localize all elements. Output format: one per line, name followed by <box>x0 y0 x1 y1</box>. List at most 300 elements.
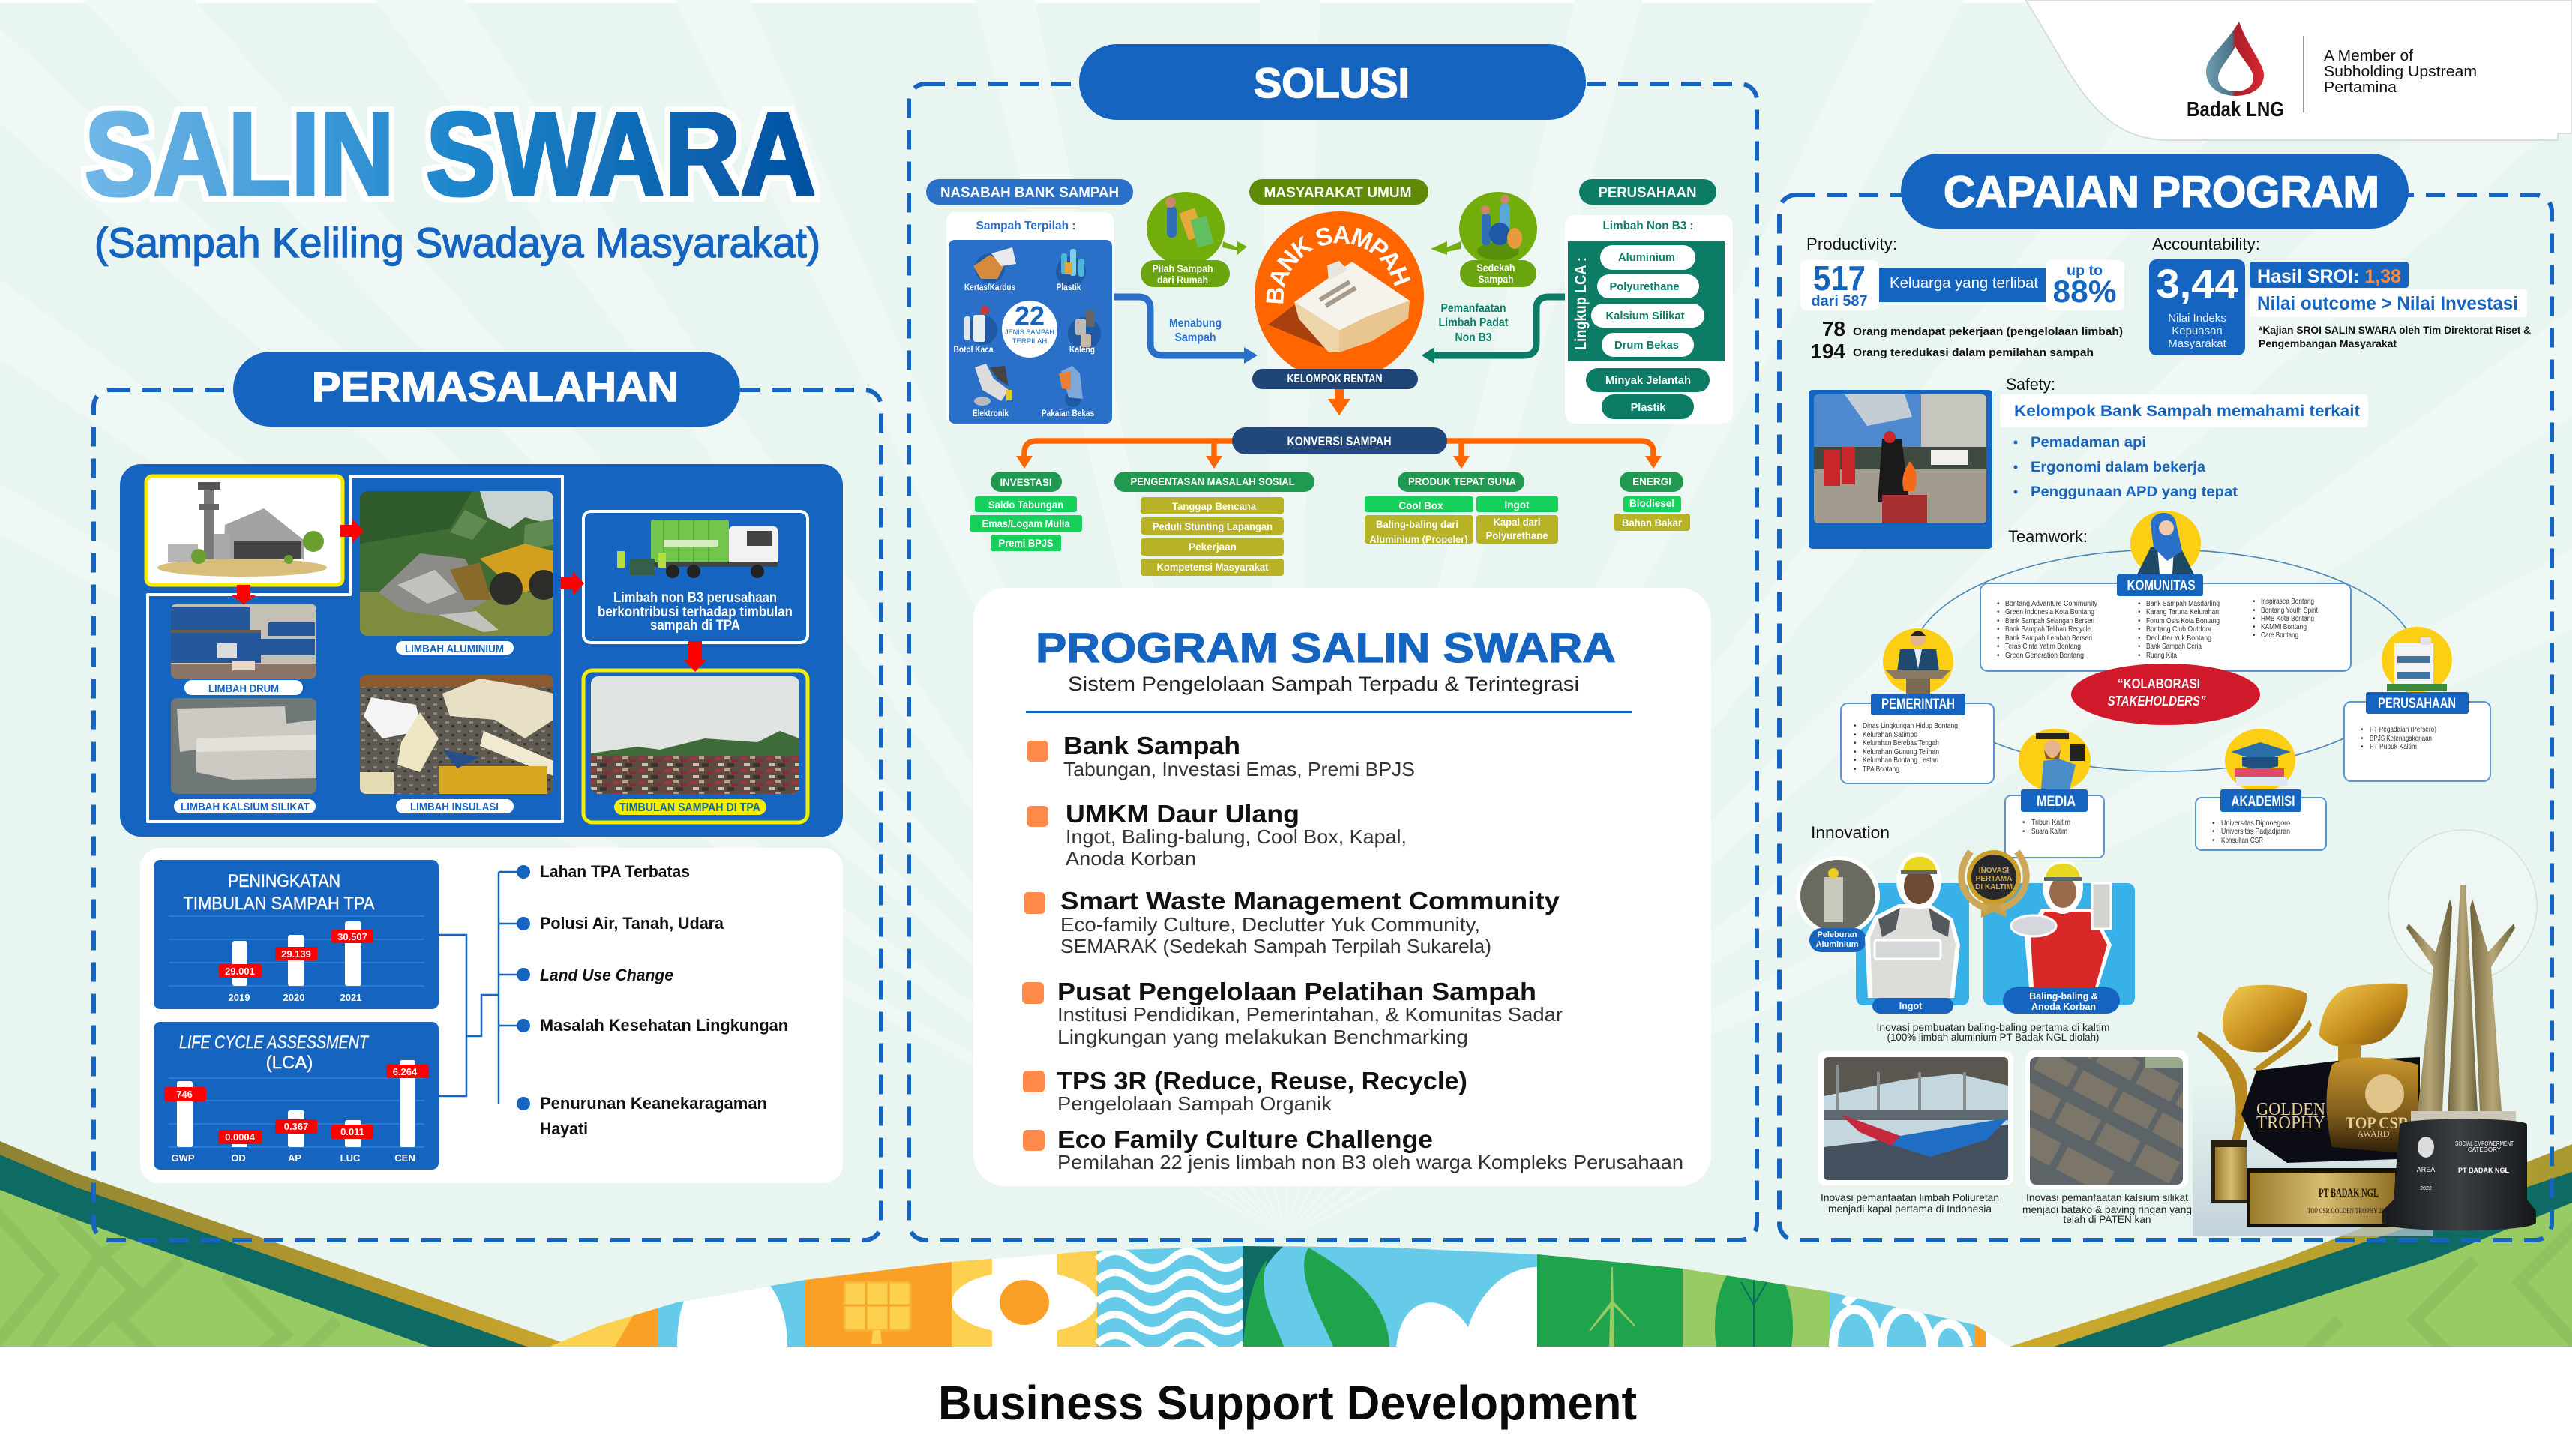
label: kelompok rentan: KELOMPOK RENTAN <box>1287 373 1383 385</box>
arrow: waste to truck <box>561 571 584 595</box>
stat: families involved <box>1800 259 2124 310</box>
photo: peleburan aluminium: Aluminium <box>1816 940 1859 949</box>
heading: permasalahan <box>233 352 740 427</box>
trophy: area: SOCIAL EMPOWERMENT <box>2455 1140 2514 1147</box>
stakeholder: pemerintah <box>1841 628 1994 783</box>
list: energi: Bahan Bakar <box>1622 517 1683 529</box>
heading: solusi: SOLUSI <box>1254 59 1410 106</box>
callout: safety list <box>2000 394 2368 500</box>
list: investasi: Saldo Tabungan <box>988 499 1063 511</box>
list: produk tepat guna: Kapal dari <box>1494 517 1540 528</box>
arrow: truck to landfill <box>684 641 706 672</box>
photo: peleburan aluminium <box>1796 856 1880 952</box>
bar chart: life cycle assessment: 0.0004 <box>225 1131 256 1143</box>
list: komunitas column 3: • <box>2253 598 2256 606</box>
panel: waste flow <box>120 464 843 837</box>
list: pemerintah: Kelurahan Berebas Tengah <box>1863 739 1939 747</box>
pill: konversi sampah <box>1232 427 1447 454</box>
item: pusat pengelolaan pelatihan sampah <box>1022 978 1563 1048</box>
stakeholder: akademisi <box>2196 729 2326 850</box>
bar chart: peningkatan timbulan sampah: 2020 <box>283 992 304 1003</box>
list: produk tepat guna: Polyurethane <box>1486 530 1548 541</box>
callout: non B3 waste and truck: Limbah non B3 perusahaan <box>613 590 777 606</box>
list: produk tepat guna: Baling-baling dari <box>1376 519 1458 530</box>
pill: nasabah bank sampah <box>926 179 1133 205</box>
arrow: menabung <box>1112 297 1245 355</box>
list: pemerintah: Dinas Lingkungan Hidup Bontang <box>1863 722 1958 730</box>
pill: perusahaan <box>1579 179 1716 205</box>
photo: insulation <box>360 675 553 794</box>
stat: sroi: Pengembangan Masyarakat <box>2259 337 2397 349</box>
list: akademisi: Universitas Diponegoro <box>2221 819 2290 828</box>
trophy: top csr golden: TOP CSR GOLDEN TROPHY 2022 <box>2307 1207 2390 1215</box>
heading: accountability: Accountability: <box>2152 235 2260 253</box>
pills: category headers: PENGENTASAN MASALAH SOSIAL <box>1131 476 1294 487</box>
stat: families involved: dari 587 <box>1812 293 1867 310</box>
list: komunitas column 3: • <box>2253 631 2256 640</box>
caption: bricks: menjadi batako & paving ringan yang <box>2022 1203 2192 1215</box>
stakeholder: media <box>2005 729 2104 858</box>
list: pemerintah: Kelurahan Gunung Telihan <box>1863 748 1939 756</box>
icon: bank sampah circle <box>1255 211 1424 369</box>
label: menabung sampah: Menabung <box>1169 317 1222 330</box>
item: tps 3r: TPS 3R (Reduce, Reuse, Recycle) <box>1057 1067 1467 1095</box>
panel: sampah terpilah: Kertas/Kardus <box>964 282 1015 292</box>
label: LIMBAH KALSIUM SILIKAT <box>181 801 310 813</box>
stat: employment and education: Orang mendapat pekerjaan (pengelolaan limbah) <box>1853 326 2123 338</box>
list: pemerintah: • <box>1854 731 1857 739</box>
pill: perusahaan: PERUSAHAAN <box>1599 185 1696 201</box>
panel: limbah non b3: Minyak Jelantah <box>1605 375 1691 387</box>
list: pengentasan masalah sosial <box>1141 497 1284 576</box>
list: problems: Land Use Change <box>540 966 673 984</box>
bar chart: life cycle assessment: (LCA) <box>266 1053 313 1073</box>
decorative corner bands left <box>0 1141 561 1347</box>
bar chart: life cycle assessment: 0.011 <box>340 1126 364 1137</box>
list: komunitas column 3: HMB Kota Bontang <box>2261 615 2314 623</box>
bar chart: life cycle assessment: OD <box>231 1152 246 1164</box>
trophy: area: 2022 <box>2420 1186 2432 1191</box>
list: produk tepat guna <box>1365 496 1558 545</box>
caption: baling-baling: (100% limbah aluminium PT Badak NGL diolah) <box>1887 1032 2100 1043</box>
photo: aluminium waste <box>360 491 559 636</box>
item: eco family culture challenge: Eco Family Culture Challenge <box>1057 1125 1433 1153</box>
decorative corner bands right <box>2010 1144 2572 1357</box>
list: komunitas column 3: • <box>2253 607 2256 615</box>
photo: innovators panels <box>1796 850 2135 1014</box>
list: media: Tribun Kaltim <box>2031 819 2070 827</box>
pill: masyarakat umum: MASYARAKAT UMUM <box>1264 185 1411 201</box>
list: problems: Polusi Air, Tanah, Udara <box>540 914 724 933</box>
list: energi: Biodiesel <box>1629 498 1674 509</box>
caption: boat <box>1821 1191 1999 1215</box>
panel: limbah non b3: Kalsium Silikat <box>1606 310 1685 322</box>
icon: kaleng <box>1068 310 1101 350</box>
trophy: top csr golden: TOP CSR <box>2346 1113 2409 1132</box>
list: komunitas column 3: Care Bontang <box>2261 631 2298 640</box>
heading: solusi <box>1079 44 1586 120</box>
list: problems: Penurunan Keanekaragaman <box>540 1094 767 1113</box>
heading: capaian program <box>1901 154 2409 229</box>
label: baling-baling: Baling-baling & <box>2029 991 2098 1002</box>
list: akademisi: • <box>2212 837 2215 845</box>
list: problems: Masalah Kesehatan Lingkungan <box>540 1016 788 1035</box>
bar chart: peningkatan timbulan sampah: TIMBULAN SAMPAH TPA <box>183 894 375 914</box>
arrow: plant to drum <box>232 585 256 604</box>
arrow: head menabung <box>1244 347 1258 364</box>
icon: elektronik <box>974 364 1012 406</box>
list: media <box>2022 819 2070 836</box>
label: ingot: Ingot <box>1899 1001 1923 1011</box>
icon: sedekah sampah: Sampah <box>1479 274 1513 285</box>
list: produk tepat guna: Ingot <box>1504 499 1530 511</box>
pill: nasabah bank sampah: NASABAH BANK SAMPAH <box>940 185 1119 201</box>
list: komunitas column 1: Green Indonesia Kota Bontang <box>2005 608 2094 616</box>
stakeholder: komunitas <box>1980 511 2351 671</box>
trophy: top csr golden: TROPHY <box>2256 1113 2325 1133</box>
heading: permasalahan: PERMASALAHAN <box>312 363 679 410</box>
list: perusahaan: PT Pegadaian (Persero) <box>2370 726 2436 734</box>
bar chart: life cycle assessment: GWP <box>171 1152 195 1164</box>
callout: safety list: Pemadaman api <box>2031 435 2146 451</box>
list: komunitas column 2: • <box>2138 608 2141 616</box>
trophy: area: PT BADAK NGL <box>2458 1167 2509 1174</box>
list: komunitas column 1: • <box>1997 634 2000 643</box>
pill: masyarakat umum <box>1249 179 1428 205</box>
photo: safety training <box>1809 390 1992 549</box>
list: perusahaan: BPJS Ketenagakerjaan <box>2370 735 2432 743</box>
photo: landfill: TIMBULAN SAMPAH DI TPA <box>619 801 760 814</box>
list: perusahaan: PT Pupuk Kaltim <box>2370 743 2417 751</box>
pills: category headers <box>991 472 1683 492</box>
stat: families involved: 517 <box>1813 259 1866 298</box>
22 jenis sampah badge: TERPILAH <box>1012 337 1047 346</box>
photo: boat <box>1818 1051 2013 1185</box>
list: investasi: Premi BPJS <box>999 538 1053 549</box>
main title <box>85 88 816 220</box>
22 jenis sampah badge <box>1002 301 1057 358</box>
callout: non B3 waste and truck: berkontribusi terhadap timbulan <box>598 604 793 620</box>
list: komunitas column 3: KAMMI Bontang <box>2261 623 2307 631</box>
stat: sroi: Hasil SROI: 1,38 <box>2257 266 2401 287</box>
list: komunitas column 2: Forum Osis Kota Bontang <box>2146 617 2220 625</box>
callout: kolaborasi stakeholders: STAKEHOLDERS” <box>2107 694 2206 709</box>
item: eco family culture challenge <box>1023 1125 1683 1173</box>
callout: non B3 waste and truck <box>583 511 808 643</box>
icon: pilah sampah: Pilah Sampah <box>1152 263 1213 274</box>
heading: teamwork: Teamwork: <box>2008 527 2088 546</box>
item: pusat pengelolaan pelatihan sampah: Pusat Pengelolaan Pelatihan Sampah <box>1057 978 1536 1005</box>
bar chart: peningkatan timbulan sampah: 2021 <box>340 992 361 1003</box>
list: komunitas column 1: Bank Sampah Selangan Berseri <box>2005 617 2094 625</box>
list: komunitas column 2: • <box>2138 643 2141 651</box>
item: umkm daur ulang: Ingot, Baling-balung, Cool Box, Kapal, <box>1066 825 1407 848</box>
label: baling-baling: Anoda Korban <box>2031 1002 2096 1012</box>
list: perusahaan: • <box>2361 726 2364 734</box>
list: pemerintah: Kelurahan Satimpo <box>1863 731 1917 739</box>
icon: kardus <box>973 247 1016 283</box>
callout: safety list: Kelompok Bank Sampah memahami terkait <box>2014 403 2360 420</box>
trophy: top csr golden: PT BADAK NGL <box>2319 1187 2379 1200</box>
white outline of waste group <box>148 476 562 822</box>
panel: limbah non b3: Limbah Non B3 : <box>1603 220 1693 232</box>
stat: sroi: *Kajian SROI SALIN SWARA oleh Tim Direktorat Riset & <box>2259 324 2531 336</box>
22 jenis sampah badge: JENIS SAMPAH <box>1005 328 1054 337</box>
list: komunitas column 1: • <box>1997 625 2000 634</box>
label: pemanfaatan limbah: Non B3 <box>1455 331 1492 344</box>
list: komunitas column 1: Green Generation Bontang <box>2005 652 2084 660</box>
list: problems <box>517 862 788 1138</box>
arrow: down to konversi <box>1328 389 1350 415</box>
icon: bank sampah circle: BANK SAMPAH <box>1266 226 1411 304</box>
pills: category headers: PRODUK TEPAT GUNA <box>1408 476 1516 487</box>
list: komunitas column 2: Ruang Kita <box>2146 652 2177 660</box>
list: komunitas column 2: • <box>2138 634 2141 643</box>
logo panel: Pertamina <box>2324 79 2397 96</box>
label: LIMBAH ALUMINIUM <box>405 643 504 655</box>
item: bank sampah <box>1027 732 1415 780</box>
list: komunitas column 2: Bank Sampah Ceria <box>2146 643 2202 651</box>
panel: permasalahan dashed frame <box>94 390 881 1240</box>
22 jenis sampah badge: 22 <box>1015 301 1045 331</box>
list: media: • <box>2022 819 2025 827</box>
caption: boat: menjadi kapal pertama di Indonesia <box>1828 1203 1992 1215</box>
icon: gas plant <box>146 476 343 585</box>
trophies <box>2193 830 2537 1236</box>
list: pemerintah: • <box>1854 739 1857 747</box>
logo panel: A Member of <box>2324 48 2413 64</box>
stat: families involved: up to <box>2067 263 2103 279</box>
bar chart: life cycle assessment: 6.264 <box>393 1066 418 1077</box>
caption: baling-baling: Inovasi pembuatan baling-baling pertama di kaltim <box>1876 1022 2110 1033</box>
list: investasi <box>970 496 1082 551</box>
logo panel: Subholding Upstream <box>2324 64 2477 80</box>
item: smart waste management community: SEMARAK (Sedekah Sampah Terpilah Sukarela) <box>1060 935 1491 957</box>
label: pemanfaatan limbah: Pemanfaatan <box>1441 302 1506 315</box>
list: pemerintah: Kelurahan Bontang Lestari <box>1863 756 1938 765</box>
trophy: top csr golden: GOLDEN <box>2256 1100 2325 1119</box>
person with ingot <box>1865 852 1960 998</box>
panel: limbah non b3: Drum Bekas <box>1614 340 1679 352</box>
subtitle: (Sampah Keliling Swadaya Masyarakat) <box>94 219 820 266</box>
list: produk tepat guna: Aluminium (Propeler) <box>1369 534 1468 545</box>
item: pusat pengelolaan pelatihan sampah: Lingkungan yang melakukan Benchmarking <box>1057 1026 1468 1048</box>
label: menabung sampah <box>1169 317 1222 344</box>
panel: program salin swara: PROGRAM SALIN SWARA <box>1036 624 1616 671</box>
stakeholder: perusahaan <box>2344 627 2490 781</box>
connector tree <box>439 872 523 1104</box>
list: pemerintah: • <box>1854 748 1857 756</box>
list: pengentasan masalah sosial: Pekerjaan <box>1189 541 1237 553</box>
heading: safety: Safety: <box>2006 375 2055 394</box>
callout: safety list: Penggunaan APD yang tepat <box>2031 484 2238 500</box>
item: smart waste management community: Smart Waste Management Community <box>1060 887 1560 915</box>
panel: sampah terpilah: Plastik <box>1056 282 1081 292</box>
caption: bricks: telah di PATEN kan <box>2064 1213 2151 1225</box>
list: komunitas column 1: • <box>1997 608 2000 616</box>
stat: sroi <box>2250 262 2531 349</box>
label <box>184 680 303 695</box>
stat: satisfaction index <box>2149 259 2245 355</box>
bar chart: life cycle assessment: AP <box>288 1152 301 1164</box>
list: problems: Lahan TPA Terbatas <box>540 862 690 881</box>
list: komunitas column 2: Declutter Yuk Bontang <box>2146 634 2211 643</box>
list: komunitas column 1 <box>1997 600 2097 660</box>
panel: program salin swara: Sistem Pengelolaan Sampah Terpadu & Terintegrasi <box>1068 673 1579 695</box>
panel: sampah terpilah: Kaleng <box>1069 344 1095 355</box>
badge: inovasi pertama: DI KALTIM <box>1975 883 2013 891</box>
trophy: top csr golden: AWARD <box>2357 1128 2390 1139</box>
callout: kolaborasi stakeholders <box>2071 664 2260 725</box>
list: akademisi <box>2212 819 2290 845</box>
badge: inovasi pertama <box>1962 850 2026 918</box>
list: akademisi: • <box>2212 828 2215 836</box>
stakeholder: akademisi: AKADEMISI <box>2232 794 2295 810</box>
orange distribution arrows <box>1016 441 1662 469</box>
list: pengentasan masalah sosial: Peduli Stunting Lapangan <box>1153 521 1273 532</box>
stat: employment and education: 78 <box>1822 317 1845 340</box>
panel: limbah non b3: Aluminium <box>1618 252 1675 264</box>
label: pemanfaatan limbah <box>1438 302 1509 344</box>
item: umkm daur ulang <box>1027 800 1407 870</box>
footer title: Business Support Development <box>938 1376 1637 1430</box>
list: perusahaan: • <box>2361 743 2364 751</box>
list: komunitas column 1: Bank Sampah Telihan Recycle <box>2005 625 2091 634</box>
item: smart waste management community <box>1024 887 1560 957</box>
badge: inovasi pertama: PERTAMA <box>1976 875 2012 883</box>
caption: boat: Inovasi pemanfaatan limbah Poliuretan <box>1821 1191 1999 1203</box>
heading: productivity: Productivity: <box>1806 235 1897 253</box>
list: pemerintah: TPA Bontang <box>1863 765 1899 774</box>
decorative arc of coloured stripes <box>550 1246 2010 1347</box>
arrow: head pemanfaatan <box>1422 347 1434 364</box>
main title: SWARA <box>426 88 816 220</box>
list: komunitas column 3: Inspirasea Bontang <box>2261 598 2314 606</box>
list: komunitas column 1: Bontang Advanture Community <box>2005 600 2097 608</box>
bar chart: life cycle assessment: CEN <box>394 1152 415 1164</box>
caption: bricks <box>2022 1191 2192 1225</box>
list: pemerintah: • <box>1854 756 1857 765</box>
stat: employment and education <box>1810 317 2123 363</box>
stakeholder ring <box>1911 550 2417 771</box>
list: komunitas column 2: • <box>2138 617 2141 625</box>
label: baling-baling <box>2003 987 2120 1014</box>
list: komunitas column 2: • <box>2138 600 2141 608</box>
list: komunitas column 3: Bontang Youth Spirit <box>2261 607 2318 615</box>
logo panel <box>2025 0 2572 140</box>
list: komunitas column 2: • <box>2138 652 2141 660</box>
label: ingot <box>1872 998 1953 1014</box>
item: bank sampah: Bank Sampah <box>1063 732 1240 759</box>
list: komunitas column 2: • <box>2138 625 2141 634</box>
item: tps 3r <box>1023 1067 1467 1115</box>
list: komunitas column 2: Bank Sampah Masdarling <box>2146 600 2220 608</box>
label: kelompok rentan <box>1252 369 1418 389</box>
pills: category headers: ENERGI <box>1632 476 1671 487</box>
glass disc <box>2388 830 2537 981</box>
stat: families involved: Keluarga yang terlibat <box>1890 275 2038 292</box>
stakeholder: pemerintah: PEMERINTAH <box>1881 697 1955 712</box>
photo: bricks <box>2025 1050 2188 1189</box>
trophy: area: AREA <box>2417 1166 2435 1173</box>
bar chart: peningkatan timbulan sampah: PENINGKATAN <box>228 871 340 891</box>
list: pengentasan masalah sosial: Kompetensi Masyarakat <box>1156 562 1269 573</box>
list: komunitas column 2 <box>2138 600 2220 660</box>
list: komunitas column 3 <box>2253 598 2318 640</box>
caption: baling-baling <box>1876 1022 2110 1043</box>
list: pemerintah: • <box>1854 722 1857 730</box>
stat: satisfaction index: 3,44 <box>2157 262 2238 307</box>
callout: kolaborasi stakeholders: “KOLABORASI <box>2118 676 2200 691</box>
item: smart waste management community: Eco-family Culture, Declutter Yuk Community, <box>1060 913 1480 936</box>
icon: pilah sampah: dari Rumah <box>1157 274 1208 286</box>
callout: safety list: Ergonomi dalam bekerja <box>2031 460 2205 475</box>
person with propeller <box>2011 860 2112 987</box>
trophy: top csr golden <box>2197 984 2420 1227</box>
panel: capaian dashed frame <box>1779 195 2552 1240</box>
panel: limbah non b3: Polyurethane <box>1609 281 1680 293</box>
list: komunitas column 1: Teras Cinta Yatim Bontang <box>2005 643 2081 651</box>
panel: limbah non b3: Lingkup LCA : <box>1572 257 1590 350</box>
stat: sroi: Nilai outcome > Nilai Investasi <box>2257 293 2518 314</box>
list: komunitas column 3: • <box>2253 623 2256 631</box>
stat: satisfaction index: Masyarakat <box>2168 337 2227 350</box>
arrow: plant to waste <box>340 519 364 543</box>
main title: SALIN <box>85 88 394 220</box>
stat: families involved: 88% <box>2053 274 2116 309</box>
list: media: • <box>2022 828 2025 836</box>
list: produk tepat guna: Cool Box <box>1398 500 1443 511</box>
bar chart: life cycle assessment <box>154 1022 439 1170</box>
bar chart: peningkatan timbulan sampah: 30.507 <box>337 931 367 942</box>
bar chart: life cycle assessment: 746 <box>176 1089 193 1100</box>
icon: plastik <box>1056 249 1086 286</box>
panel: limbah non b3: Plastik <box>1631 402 1666 414</box>
label: LIMBAH INSULASI <box>410 801 499 813</box>
icon: sedekah sampah: Sedekah <box>1477 262 1515 274</box>
label: menabung sampah: Sampah <box>1174 331 1216 344</box>
list: problems: Hayati <box>540 1119 588 1138</box>
logo panel: Badak LNG <box>2187 97 2284 121</box>
panel: limbah non b3 <box>1565 215 1733 424</box>
pill: konversi sampah: KONVERSI SAMPAH <box>1287 435 1392 448</box>
list: komunitas column 2: Karang Taruna Kelurahan <box>2146 608 2219 616</box>
list: pemerintah <box>1854 722 1958 774</box>
callout: non B3 waste and truck: sampah di TPA <box>650 618 740 634</box>
list: komunitas column 3: • <box>2253 615 2256 623</box>
panel: sampah terpilah: Pakaian Bekas <box>1042 408 1094 418</box>
list: perusahaan <box>2361 726 2436 751</box>
panel: solusi dashed frame <box>909 84 1757 1240</box>
icon: pakaian <box>1059 366 1083 407</box>
list: investasi: Emas/Logam Mulia <box>982 518 1070 529</box>
stakeholder: media: MEDIA <box>2037 794 2076 810</box>
panel: sampah terpilah: Elektronik <box>973 408 1009 418</box>
list: komunitas column 1: • <box>1997 643 2000 651</box>
bar chart: peningkatan timbulan sampah <box>154 860 439 1009</box>
list: komunitas column 1: • <box>1997 652 2000 660</box>
footer band <box>0 1347 2572 1456</box>
list: perusahaan: • <box>2361 735 2364 743</box>
icon: sedekah sampah <box>1431 192 1537 287</box>
photo: drums <box>171 604 316 679</box>
photo: calcium silicate <box>171 698 316 794</box>
panel: program salin swara <box>973 588 1711 1186</box>
list: akademisi: Universitas Padjadjaran <box>2221 828 2290 836</box>
list: energi <box>1614 496 1690 531</box>
label: LIMBAH DRUM <box>208 682 279 695</box>
list: pengentasan masalah sosial: Tanggap Bencana <box>1172 501 1256 512</box>
